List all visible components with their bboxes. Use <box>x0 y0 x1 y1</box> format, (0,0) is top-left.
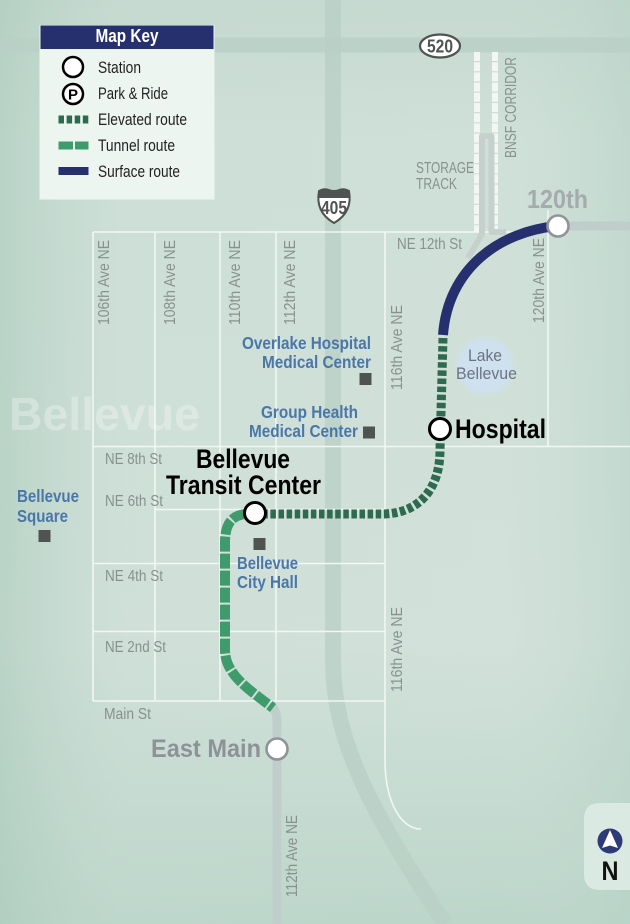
landmark labels: Medical Center <box>262 352 371 372</box>
Lake Bellevue: Bellevue <box>456 365 517 383</box>
gray extension roads <box>270 226 630 924</box>
key: surface route: Surface route <box>98 163 180 181</box>
street labels: Main St <box>104 706 151 723</box>
landmark markers <box>38 373 375 550</box>
street labels: NE 12th St <box>397 236 462 253</box>
tunnel route <box>225 514 273 708</box>
key: elevated route: Elevated route <box>98 111 187 129</box>
highway shield: 405 <box>318 189 350 223</box>
street labels: 116th Ave NE <box>389 607 406 692</box>
landmark labels: Group Health <box>261 402 358 422</box>
key: elevated route <box>58 111 187 129</box>
station: Bellevue Transit Center: Bellevue <box>196 444 290 474</box>
street labels: 116th Ave NE <box>389 305 406 390</box>
key: station <box>63 57 141 77</box>
station: Hospital <box>430 414 546 444</box>
Lake Bellevue <box>456 338 517 394</box>
street labels <box>96 57 548 897</box>
key: tunnel route: Tunnel route <box>98 137 175 155</box>
station: Bellevue Transit Center: Transit Center <box>166 470 321 500</box>
station: 120th <box>527 184 588 236</box>
landmark labels: City Hall <box>237 572 298 592</box>
highway shield: 405: 405 <box>321 198 347 218</box>
key header <box>40 26 214 49</box>
street labels: TRACK <box>416 176 457 193</box>
landmark labels: Square <box>17 506 68 526</box>
street labels: NE 2nd St <box>105 639 166 656</box>
landmark labels: Medical Center <box>249 421 358 441</box>
street labels: 106th Ave NE <box>96 240 113 325</box>
north arrow: N <box>602 856 618 886</box>
station: East Main: East Main <box>151 735 261 763</box>
landmark labels: Bellevue <box>17 486 79 506</box>
BNSF corridor dashed tracks <box>477 52 495 232</box>
storage track <box>468 136 506 258</box>
key: surface route <box>58 163 180 181</box>
landmark labels: Bellevue <box>237 553 298 573</box>
station: Bellevue Transit Center <box>166 444 321 524</box>
street labels: NE 6th St <box>105 493 163 510</box>
key header: Map Key <box>96 26 158 46</box>
street labels: 108th Ave NE <box>162 240 179 325</box>
highway shield: 520 <box>420 34 460 58</box>
Lake Bellevue: Lake <box>468 347 502 365</box>
city watermark: Bellevue <box>9 388 200 440</box>
key: park and ride: Park & Ride <box>98 85 168 103</box>
street labels: STORAGE <box>416 160 474 177</box>
street labels: 120th Ave NE <box>531 238 548 323</box>
map key panel <box>40 25 214 200</box>
highway shield: 520: 520 <box>427 36 453 56</box>
street labels: BNSF CORRIDOR <box>503 57 520 158</box>
elevated route <box>262 338 443 514</box>
surface route <box>443 226 558 335</box>
station: Hospital: Hospital <box>455 414 546 444</box>
station: 120th: 120th <box>527 184 588 214</box>
key: park and ride <box>63 84 168 104</box>
landmark labels <box>17 333 371 592</box>
key: park and ride: P <box>68 86 78 104</box>
street labels: NE 8th St <box>105 451 162 468</box>
key: station: Station <box>98 59 141 77</box>
street labels: 110th Ave NE <box>227 240 244 325</box>
street labels: NE 4th St <box>105 568 163 585</box>
key: tunnel route <box>58 137 175 155</box>
street labels: 112th Ave NE <box>282 240 299 325</box>
street labels: 112th Ave NE <box>284 815 301 897</box>
north arrow <box>584 803 630 890</box>
landmark labels: Overlake Hospital <box>242 333 371 353</box>
street grid <box>93 210 630 829</box>
